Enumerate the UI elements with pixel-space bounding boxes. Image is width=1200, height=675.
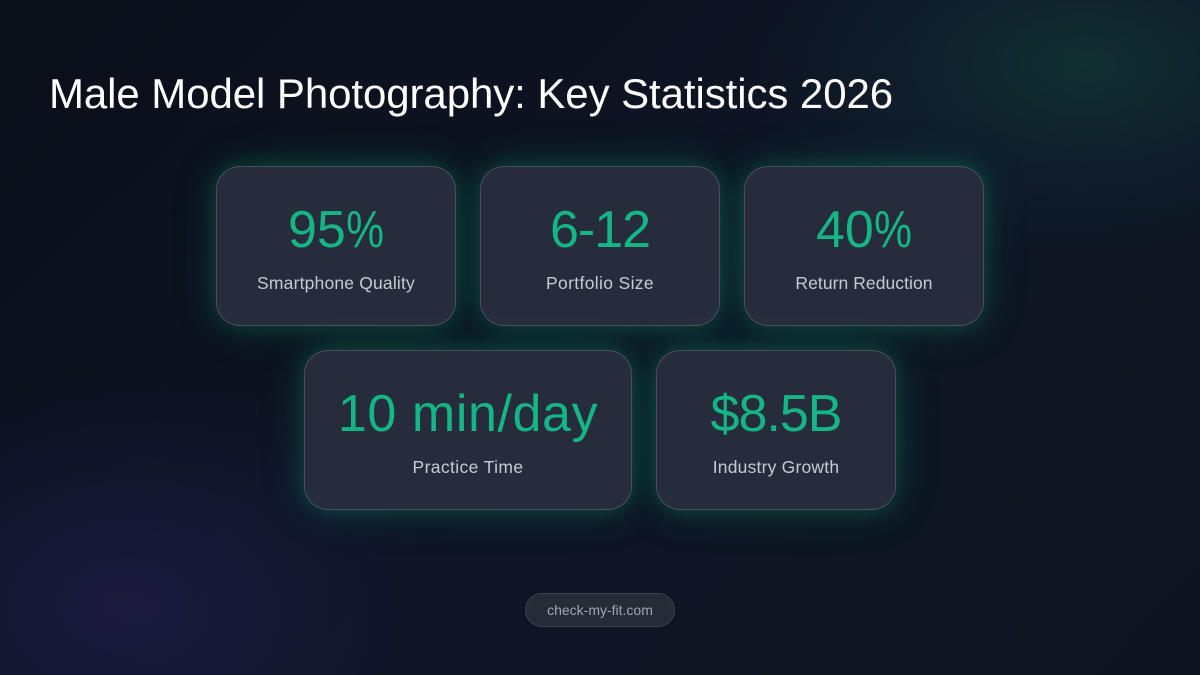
stat card: return reduction <box>744 166 984 326</box>
stat value <box>288 201 384 259</box>
source pill: check-my-fit.com <box>547 602 653 618</box>
stat label: Industry Growth <box>713 457 839 477</box>
stat card: practice time <box>304 350 632 510</box>
stat value: 10 min/day <box>338 385 598 443</box>
stat value <box>816 201 912 259</box>
stat label: Return Reduction <box>795 273 933 293</box>
stat value: % <box>346 201 384 259</box>
stat value: 6-12 <box>550 201 650 259</box>
stat value: 95 <box>288 201 346 259</box>
stat card: industry growth <box>656 350 896 510</box>
stat card: smartphone quality <box>216 166 456 326</box>
stat label: Portfolio Size <box>546 273 654 293</box>
source pill <box>525 593 675 627</box>
stat value: 40 <box>816 201 874 259</box>
stat label: Practice Time <box>413 457 523 477</box>
title: Male Model Photography: Key Statistics 2026 <box>49 70 893 117</box>
stat card: portfolio size <box>480 166 720 326</box>
stat value: $8.5B <box>711 385 841 443</box>
stat label: Smartphone Quality <box>257 273 415 293</box>
stat value: % <box>874 201 912 259</box>
